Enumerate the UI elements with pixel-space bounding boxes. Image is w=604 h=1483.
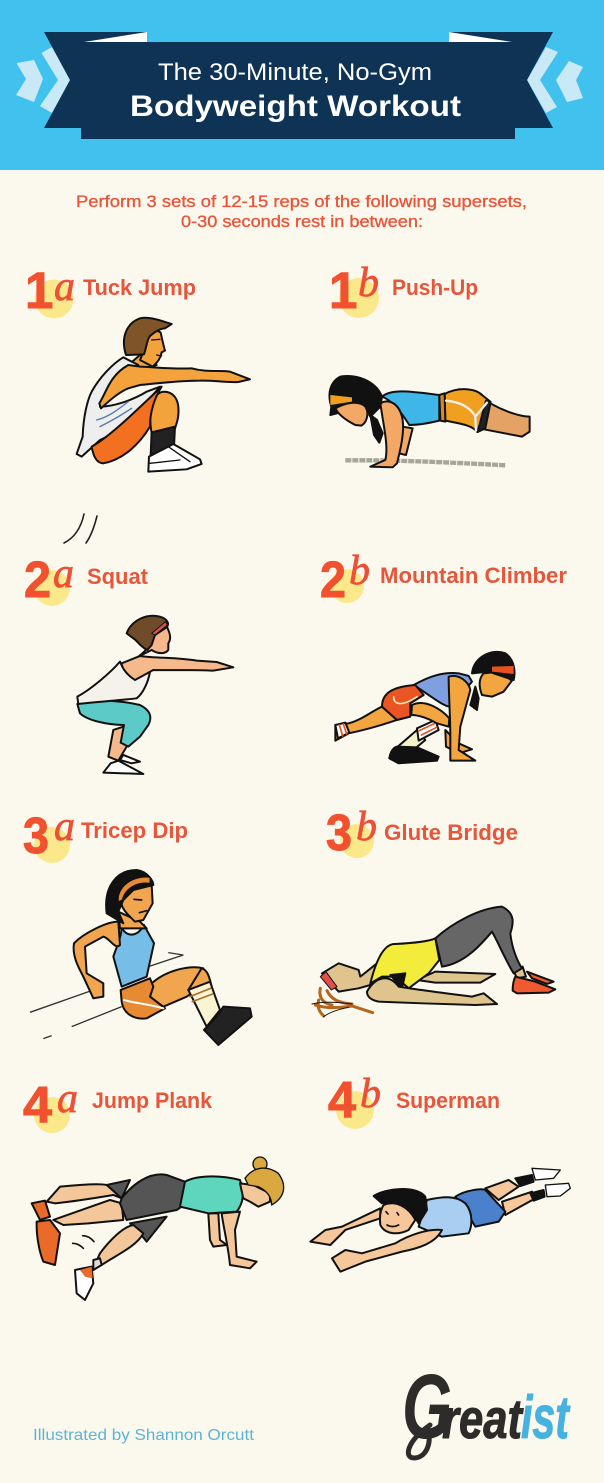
logo: Greatist <box>402 1356 571 1458</box>
title banner <box>44 32 553 139</box>
icon: right chevrons <box>527 47 583 113</box>
heading: 4a Jump Plank: 4 <box>23 1076 53 1133</box>
heading: 1a Tuck Jump: 1 <box>25 262 53 319</box>
heading: 4b Superman: b <box>360 1071 381 1117</box>
instructions text <box>76 192 527 231</box>
instructions text: 0-30 seconds rest in between: <box>181 212 423 231</box>
heading: 2a Squat: Squat <box>87 564 149 589</box>
logo: Greatist: ist <box>521 1384 571 1451</box>
heading: 3b Glute Bridge: b <box>356 804 377 850</box>
credit text: Illustrated by Shannon Orcutt <box>33 1427 255 1444</box>
heading: 1b Push-Up: Push-Up <box>392 275 478 300</box>
icon: motion lines <box>64 514 97 543</box>
heading: 2b Mountain Climber: Mountain Climber <box>380 563 567 588</box>
ground shadow <box>345 460 505 465</box>
title line 1: The 30-Minute, No-Gym <box>158 59 432 86</box>
bench lines <box>30 953 183 1039</box>
figure: tricep dip <box>30 870 252 1045</box>
heading: 1b Push-Up <box>329 260 478 319</box>
logo: Greatist: reat <box>442 1387 524 1450</box>
heading: 3a Tricep Dip: a <box>54 804 75 850</box>
heading: 2a Squat <box>24 551 149 608</box>
logo: Greatist: G <box>402 1356 452 1458</box>
icon: left chevrons <box>16 47 70 113</box>
heading: 1a Tuck Jump <box>25 262 196 319</box>
figure: superman <box>310 1168 570 1272</box>
heading: 3b Glute Bridge: Glute Bridge <box>384 820 518 845</box>
instructions text: Perform 3 sets of 12-15 reps of the following supersets, <box>76 192 527 211</box>
figure: glute bridge <box>312 907 555 1017</box>
figure: mountain climber <box>335 652 514 763</box>
heading: 1a Tuck Jump: a <box>54 264 75 310</box>
heading: 4b Superman <box>328 1071 500 1129</box>
heading: 4a Jump Plank: a <box>57 1076 78 1122</box>
heading: 4b Superman: Superman <box>396 1088 500 1113</box>
heading: 4b Superman: 4 <box>328 1071 357 1128</box>
figure: jump plank <box>32 1157 284 1300</box>
heading: 4a Jump Plank <box>23 1076 213 1133</box>
heading: 3a Tricep Dip: 3 <box>23 807 49 864</box>
figure: push-up <box>329 376 530 467</box>
heading: 2b Mountain Climber: 2 <box>320 551 346 608</box>
figure: tuck jump <box>77 318 250 472</box>
heading: 1b Push-Up: b <box>358 260 379 306</box>
heading: 2a Squat: 2 <box>24 551 51 608</box>
title line 2: Bodyweight Workout <box>130 90 461 123</box>
heading: 1a Tuck Jump: Tuck Jump <box>83 275 196 300</box>
header band <box>0 0 604 170</box>
heading: 3a Tricep Dip: Tricep Dip <box>81 818 188 843</box>
figure: squat <box>77 616 233 774</box>
heading: 2b Mountain Climber: b <box>349 548 370 594</box>
heading: 3b Glute Bridge: 3 <box>326 804 352 861</box>
heading: 2a Squat: a <box>53 551 74 597</box>
heading: 2b Mountain Climber <box>320 548 567 608</box>
heading: 1b Push-Up: 1 <box>329 262 357 319</box>
heading: 3b Glute Bridge <box>326 804 518 861</box>
heading: 3a Tricep Dip <box>23 804 188 864</box>
heading: 4a Jump Plank: Jump Plank <box>92 1088 213 1113</box>
